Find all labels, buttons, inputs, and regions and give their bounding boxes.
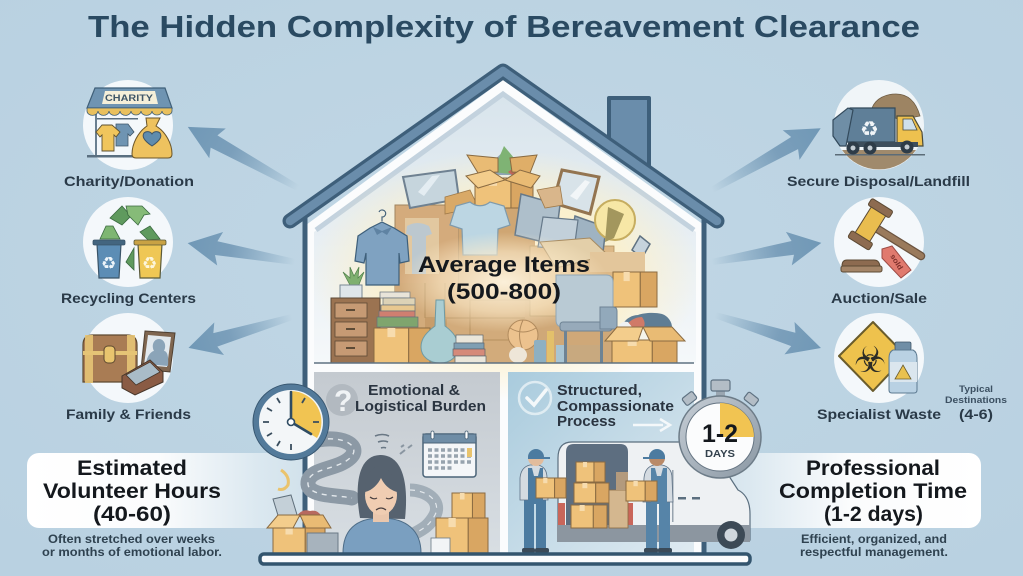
boxes right	[431, 493, 488, 553]
house base	[260, 554, 750, 564]
winding road	[308, 439, 354, 498]
clutter pile	[331, 146, 685, 363]
text: volunteer hours: Estimated	[77, 457, 187, 480]
label: family and friends: Family & Friends	[66, 406, 191, 422]
text: volunteer hours: Volunteer Hours	[43, 480, 221, 503]
arrow: house to specialist waste	[710, 299, 826, 364]
grey cases	[515, 194, 560, 245]
note: completion time: respectful management.	[800, 547, 948, 559]
bottles	[534, 331, 566, 363]
t-shirt	[450, 202, 510, 255]
panel heading: process	[557, 383, 674, 430]
text: completion time: (1-2 days)	[824, 503, 923, 526]
panel heading: process: Compassionate	[557, 399, 674, 415]
text: volunteer hours: (40-60)	[93, 503, 171, 526]
note: volunteer hours: or months of emotional labor.	[42, 547, 222, 559]
note: volunteer hours: Often stretched over weeks	[48, 534, 215, 546]
house	[290, 71, 717, 553]
delivery van	[557, 442, 750, 549]
icon: recycling bins: ♻	[101, 254, 116, 274]
label: secure disposal/landfill: Secure Disposal/Landfill	[787, 173, 970, 189]
center text: average items: Average Items	[418, 252, 590, 277]
box carried	[626, 481, 657, 501]
icon: charity shop: CHARITY	[105, 93, 154, 104]
plant	[340, 267, 364, 299]
chair	[556, 275, 617, 363]
icon: charity shop	[83, 80, 173, 170]
panel heading: burden: Logistical Burden	[355, 399, 486, 415]
roof	[290, 71, 717, 221]
text: completion time: Professional	[806, 457, 940, 480]
icon: recycling bins	[83, 197, 173, 287]
arrow: house to family	[184, 301, 297, 364]
house interior	[306, 80, 704, 553]
icon: auction gavel	[834, 197, 924, 287]
label: recycling centers: Recycling Centers	[61, 290, 196, 306]
icon: recycling bins: ♻	[142, 254, 157, 274]
panel heading: process: Structured,	[557, 383, 642, 399]
text glow	[399, 232, 609, 332]
pill: completion time	[690, 453, 981, 528]
panel: emotional and logistical burden	[267, 372, 500, 553]
blue shirt on hanger	[355, 210, 409, 285]
icon: check circle	[519, 382, 551, 414]
center text: average items: (500-800)	[447, 279, 561, 304]
panel heading: burden	[355, 383, 486, 415]
vase	[421, 300, 458, 363]
worker left	[520, 449, 566, 553]
panel heading: burden: Emotional &	[368, 383, 461, 399]
icon: question mark	[326, 384, 358, 418]
arrow: house to recycling	[185, 226, 298, 279]
worker right	[626, 449, 673, 553]
label: charity/donation: Charity/Donation	[64, 173, 194, 189]
text: volunteer hours	[43, 457, 221, 526]
mirror right	[553, 170, 599, 214]
lamp / tools	[632, 236, 650, 258]
note: completion time	[800, 534, 948, 559]
wheel	[717, 521, 745, 549]
note: typical destinations: (4-6)	[959, 406, 993, 422]
note: typical destinations	[945, 384, 1007, 422]
note: typical destinations: Typical	[959, 384, 993, 394]
title: The Hidden Complexity of Bereavement Clearance	[88, 9, 920, 44]
icon: biohazard sign and bottle	[834, 313, 924, 403]
arrow: process	[633, 419, 670, 431]
top open box	[466, 146, 540, 208]
note: completion time: Efficient, organized, and	[801, 534, 947, 546]
label: auction/sale: Auction/Sale	[831, 290, 927, 306]
icon: biohazard sign and bottle: ☣	[854, 340, 886, 381]
drawers	[331, 298, 380, 363]
floor line	[314, 362, 694, 364]
text: completion time: Completion Time	[779, 480, 967, 503]
panel: structured compassionate process	[508, 372, 694, 553]
icon: chest and keepsakes	[83, 313, 175, 403]
icon: clock	[253, 384, 329, 460]
books stack	[377, 292, 418, 327]
worry symbols	[278, 434, 412, 490]
books	[453, 335, 486, 363]
light bulb	[595, 200, 635, 240]
arrow: house to disposal	[704, 113, 829, 205]
panel heading: process: Process	[557, 414, 616, 430]
box front left	[374, 328, 430, 363]
person	[343, 455, 421, 553]
wardrobe and furniture backdrop	[395, 205, 459, 363]
pill: volunteer hours	[27, 453, 317, 528]
ball	[508, 320, 538, 363]
label: specialist waste: Specialist Waste	[817, 406, 941, 422]
stopwatch text: DAYS	[705, 448, 735, 460]
stopwatch text	[702, 420, 738, 460]
arrow: house to charity	[180, 112, 306, 203]
boxes left	[267, 495, 338, 553]
mirror left	[403, 170, 459, 208]
arrow: house to auction	[709, 226, 824, 279]
icon: question mark: ?	[334, 385, 352, 418]
icon: stopwatch 1-2 days	[679, 380, 761, 478]
box right	[613, 272, 657, 307]
text: completion time	[779, 457, 967, 526]
box carried	[536, 478, 566, 498]
stopwatch text: 1-2	[702, 420, 738, 448]
open box right	[605, 313, 685, 363]
note: volunteer hours	[42, 534, 222, 559]
icon: auction gavel: sold	[888, 252, 905, 272]
icon: garbage truck: ♻	[860, 117, 879, 141]
note: typical destinations: Destinations	[945, 395, 1007, 405]
chimney	[609, 98, 649, 172]
icon: garbage truck	[833, 80, 925, 170]
center text: average items	[418, 252, 590, 304]
cargo boxes	[576, 462, 605, 482]
calendar	[423, 431, 476, 477]
